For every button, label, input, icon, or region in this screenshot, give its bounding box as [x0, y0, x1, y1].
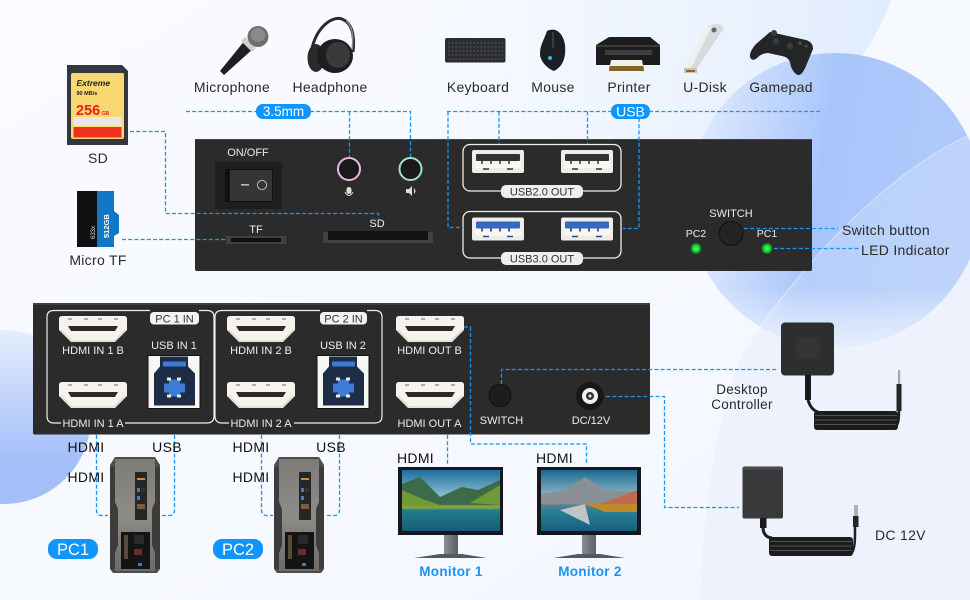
- desktop controller: [711, 322, 902, 430]
- SD card: Extreme: [76, 78, 110, 88]
- PC2 badge: PC2: [222, 541, 254, 559]
- PC 1 input group: HDMI IN 1 B: [62, 345, 124, 357]
- HDMI outputs: [396, 316, 464, 430]
- DC 12V jack: DC/12V: [572, 415, 611, 427]
- microphone: Microphone: [194, 79, 270, 95]
- SD card: 256 GB: [76, 103, 109, 119]
- PC 1 input group: [47, 310, 214, 430]
- PC1 badge: [48, 539, 98, 559]
- button and LED labels: [842, 222, 950, 258]
- SD card: SD: [88, 150, 108, 166]
- keyboard: Keyboard: [447, 79, 509, 95]
- HDMI outputs: HDMI OUT A: [398, 418, 462, 430]
- monitor 2: [537, 467, 641, 579]
- cable labels: USB: [316, 439, 346, 455]
- SD card: [67, 65, 128, 166]
- cable labels: USB: [152, 439, 182, 455]
- connector lines top: [122, 112, 860, 248]
- audio jacks: [338, 158, 422, 196]
- headphone: Headphone: [292, 79, 368, 95]
- USB3.0 ports: [463, 212, 621, 266]
- PC 2 input group: HDMI IN 2 A: [230, 418, 292, 430]
- cable labels: HDMI: [68, 469, 104, 485]
- DC 12V jack: [572, 382, 611, 427]
- PC1 badge: PC1: [57, 541, 89, 559]
- switch button and LEDs: SWITCH: [709, 208, 753, 220]
- U-disk: U-Disk: [683, 79, 728, 95]
- DC power adapter: DC 12V: [875, 527, 926, 543]
- desktop controller: Controller: [711, 397, 773, 412]
- power switch: [215, 147, 282, 209]
- USB3.0 ports: USB3.0 OUT: [510, 254, 574, 266]
- printer: Printer: [607, 79, 651, 95]
- PC 2 input group: PC 2 IN: [324, 313, 363, 325]
- desktop controller: Desktop: [716, 382, 768, 397]
- cable labels: HDMI: [68, 439, 104, 455]
- Micro TF card: [69, 191, 127, 268]
- USB badge: USB: [616, 104, 645, 120]
- headphone: [292, 18, 368, 95]
- 3.5mm badge: 3.5mm: [263, 104, 304, 119]
- TF slot: [226, 224, 286, 244]
- DC power adapter: [742, 466, 926, 556]
- cable labels: HDMI: [233, 439, 269, 455]
- connector lines bottom: [96, 327, 778, 516]
- cable labels: [68, 439, 573, 485]
- PC 2 input group: USB IN 2: [320, 340, 366, 352]
- PC 2 input group: HDMI IN 2 B: [230, 345, 292, 357]
- PC 1 input group: USB IN 1: [151, 340, 197, 352]
- PC1 tower: [110, 457, 160, 573]
- USB2.0 ports: USB2.0 OUT: [510, 186, 574, 198]
- TF slot: TF: [249, 224, 263, 236]
- button and LED labels: LED Indicator: [861, 242, 950, 258]
- Micro TF card: 633x: [91, 226, 97, 239]
- monitor 1: [398, 467, 503, 579]
- HDMI outputs: HDMI OUT B: [397, 345, 462, 357]
- mouse: Mouse: [531, 79, 575, 95]
- gamepad: Gamepad: [749, 79, 813, 95]
- printer: [596, 37, 660, 95]
- cable labels: HDMI: [397, 450, 434, 466]
- button and LED labels: Switch button: [842, 222, 930, 238]
- microphone: [194, 26, 270, 95]
- U-disk: [683, 24, 728, 95]
- rear device panel: [33, 303, 650, 434]
- rear switch port: SWITCH: [480, 415, 523, 427]
- PC2 tower: [274, 457, 324, 573]
- switch button and LEDs: [686, 208, 777, 254]
- cable labels: HDMI: [233, 469, 269, 485]
- USB2.0 ports: [463, 144, 621, 198]
- SD slot: [323, 218, 433, 243]
- PC 1 input group: PC 1 IN: [155, 313, 194, 325]
- mouse: [531, 30, 575, 95]
- SD slot: SD: [369, 218, 385, 230]
- keyboard: [445, 38, 509, 95]
- PC2 badge: [213, 539, 263, 559]
- rear switch port: [480, 384, 523, 427]
- cable labels: HDMI: [536, 450, 573, 466]
- Micro TF card: 512GB: [102, 214, 111, 238]
- PC 2 input group: [215, 310, 382, 430]
- power switch: ON/OFF: [227, 147, 269, 159]
- top device panel: [195, 139, 812, 271]
- SD card: 90 MB/s: [76, 91, 97, 97]
- monitor 1: Monitor 1: [419, 564, 483, 579]
- PC 1 input group: HDMI IN 1 A: [62, 418, 124, 430]
- monitor 2: Monitor 2: [558, 564, 622, 579]
- switch button and LEDs: PC2: [686, 228, 706, 240]
- switch button and LEDs: PC1: [757, 228, 777, 240]
- gamepad: [749, 30, 813, 95]
- Micro TF card: Micro TF: [69, 252, 127, 268]
